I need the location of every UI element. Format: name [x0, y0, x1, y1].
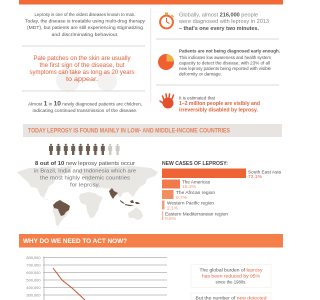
line chart: declining cases: 600,000 — [26, 270, 41, 275]
heading banner: where leprosy is found: TODAY LEPROSY IS FOUND MAINLY IN LOW- AND MIDDLE-INCOME COUNTRIES — [28, 129, 230, 135]
callout: burden reduced: since the 1980s. — [216, 280, 246, 284]
chart: new cases of leprosy by region — [162, 161, 282, 221]
panel: intro text — [25, 12, 146, 38]
map highlight: India — [109, 188, 118, 199]
map highlight: Indonesia — [120, 200, 140, 206]
chart: new cases of leprosy by region: 72.1% — [248, 174, 262, 179]
panel: late diagnosis statistic: Patients are not being diagnosed early enough. — [179, 48, 281, 54]
line chart: declining cases — [26, 255, 167, 300]
panel: late diagnosis statistic: capacity to detect the disease, with 23% of all — [179, 60, 270, 66]
panel: late diagnosis statistic: This indicates low awareness and health system — [179, 55, 271, 60]
panel: late diagnosis statistic: deformity or damage. — [179, 72, 222, 76]
panel: disabled statistic: 1–2 million people are visibly and — [179, 101, 260, 107]
chart: new cases of leprosy by region: South East Asia — [248, 169, 282, 174]
panel: pale patches callout: symptoms can take as long as 20 years — [30, 70, 134, 76]
callout: burden reduced: The global burden of leprosy — [200, 268, 263, 272]
map highlight: Brazil — [53, 200, 70, 216]
panel: global diagnosis statistic: were diagnosed with leprosy in 2013 — [178, 19, 269, 25]
panel: intro text: and discriminating behaviour. — [52, 32, 118, 38]
line chart: declining cases: 300,000 — [26, 292, 41, 298]
panel: pale patches callout: to appear. — [66, 77, 98, 83]
callout: burden reduced: has been reduced by 95% — [202, 274, 260, 279]
line chart: declining cases: 700,000 — [26, 262, 41, 268]
panel: disabled statistic: irreversibly disabled by leprosy. — [179, 108, 259, 114]
text: eight out of ten patients — [34, 161, 136, 188]
panel: late diagnosis statistic — [179, 48, 281, 76]
line chart: declining cases: 500,000 — [26, 278, 41, 282]
line chart: declining cases: 400,000 — [26, 285, 41, 290]
chart: new cases of leprosy by region: 15.3% — [182, 184, 196, 189]
heading banner: why act now — [19, 234, 283, 248]
chart: new cases of leprosy by region: 0.8% — [165, 216, 176, 221]
callout: burden reduced — [191, 264, 271, 288]
chart: new cases of leprosy by region: Western Pacific region — [167, 200, 215, 206]
chart: new cases of leprosy by region: 9.7% — [176, 195, 187, 200]
chart: new cases of leprosy by region: 2.1% — [167, 206, 178, 210]
heading banner: why act now: WHY DO WE NEED TO ACT NOW? — [23, 238, 127, 245]
chart: new cases of leprosy by region: The African region — [176, 190, 216, 195]
panel: children statistic: Almost 1 in 10 newly diagnosed patients are children, — [28, 100, 142, 108]
panel: children statistic: indicating continued transmission of the disease. — [32, 108, 138, 113]
top orange bar — [19, 0, 283, 4]
chart: new cases of leprosy by region: The Americas — [182, 179, 211, 184]
panel: intro text: Leprosy is one of the oldest diseases known to man. — [34, 12, 136, 18]
panel: intro text: Today, the disease is treatable using multi-drug therapy — [25, 19, 146, 25]
chart: new cases of leprosy by region: NEW CASES OF LEPROSY: — [162, 161, 228, 167]
panel: intro text: (MDT), but patients are still experiencing stigmatizing — [27, 25, 143, 31]
panel: disabled statistic: It is estimated that — [179, 96, 216, 100]
panel: late diagnosis statistic: new leprosy patients being reported with visible — [179, 66, 272, 71]
chart: new cases of leprosy by region: Eastern Mediterranean region — [165, 212, 229, 216]
panel: disabled statistic — [179, 96, 260, 114]
panel: global diagnosis statistic: – that's one every two minutes. — [179, 26, 259, 32]
icon: stopwatch — [160, 12, 174, 28]
text: eight out of ten patients: in Brazil, India and Indonesia which are — [34, 168, 136, 174]
text: eight out of ten patients: the most highly endemic countries — [40, 176, 130, 182]
icon row: ten people, eight dark — [49, 144, 120, 155]
callout: new detected cases — [191, 293, 271, 300]
world map — [17, 166, 158, 226]
panel: pale patches callout: Pale patches on the skin are usually — [34, 56, 130, 62]
text: eight out of ten patients: for leprosy. — [70, 182, 101, 188]
column divider — [150, 8, 151, 102]
panel: global diagnosis statistic: Globally, almost 216,000 people — [179, 12, 258, 18]
panel: global diagnosis statistic — [178, 12, 269, 32]
heading banner: where leprosy is found — [23, 124, 282, 137]
panel: pale patches callout: the first sign of the disease, but — [40, 63, 125, 69]
icon: hand print — [160, 94, 174, 108]
line chart: declining cases: 800,000 — [26, 255, 41, 260]
text: eight out of ten patients: 8 out of 10 new leprosy patients occur — [35, 161, 135, 167]
panel: children statistic — [28, 100, 142, 113]
panel: pale patches callout — [30, 56, 134, 92]
icon: pie chart — [158, 54, 174, 70]
